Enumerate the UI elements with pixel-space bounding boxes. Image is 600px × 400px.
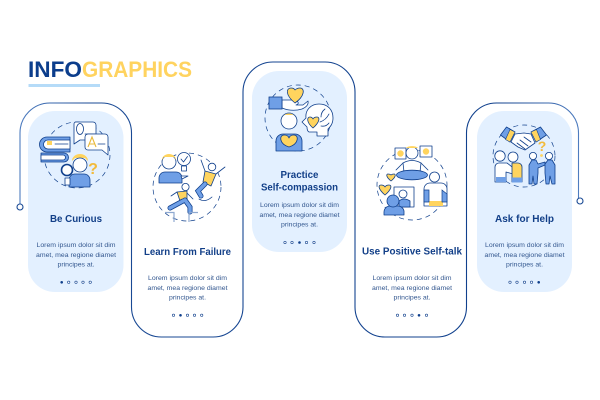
text block: principes at. [394, 294, 431, 302]
text block: amet, mea regione diamet [260, 212, 340, 219]
heading line 2: Self-compassion [261, 182, 338, 194]
text block: Lorem ipsum dolor sit dim [148, 275, 227, 282]
icon: heart in hand and head [265, 85, 333, 151]
text block [260, 202, 340, 228]
icon: meditation and conversation [377, 146, 447, 220]
panel: ask for help [477, 111, 572, 292]
panel: use positive self-talk [362, 146, 462, 317]
text block: Lorem ipsum dolor sit dim [260, 202, 339, 209]
icon: books and questions: ? [88, 161, 98, 178]
icon: handshake and helpers [493, 125, 555, 187]
panel: be curious [28, 111, 124, 292]
text block: amet, mea regione diamet [148, 285, 228, 292]
pager dots [284, 241, 315, 244]
text block: amet, mea regione diamet [36, 252, 116, 259]
text block: principes at. [506, 262, 543, 268]
title: GRAPHICS [82, 57, 192, 82]
text block [372, 275, 452, 302]
text block [484, 242, 565, 268]
title [28, 57, 192, 82]
text block: Lorem ipsum dolor sit dim [372, 275, 452, 282]
pager dots [509, 281, 540, 284]
heading: Ask for Help [495, 213, 554, 225]
heading: Be Curious [50, 213, 102, 225]
text block: Lorem ipsum dolor sit dim [485, 242, 564, 249]
text block [148, 275, 228, 302]
text block: amet, mea regione diamet [484, 252, 565, 259]
icon: figures and lightbulb [153, 152, 225, 222]
pager dots [172, 314, 203, 317]
text block: principes at. [281, 222, 318, 228]
pager dots [396, 314, 428, 317]
panel: learn from failure [144, 152, 231, 317]
text block: amet, mea regione diamet [372, 285, 452, 292]
heading: Learn From Failure [144, 246, 231, 258]
heading: Practice [280, 169, 319, 181]
title underline [28, 84, 100, 87]
text block: principes at. [58, 262, 95, 268]
title: INFO [28, 57, 82, 82]
text block: Lorem ipsum dolor sit dim [36, 242, 116, 249]
text block [36, 242, 116, 268]
panel: practice self-compassion [252, 71, 347, 252]
heading: Use Positive Self-talk [362, 246, 462, 258]
connecting outline [17, 62, 583, 337]
icon: books and questions [40, 122, 110, 188]
text block: principes at. [169, 294, 206, 302]
icon: handshake and helpers: ? [538, 138, 546, 154]
pager dots [60, 281, 91, 284]
